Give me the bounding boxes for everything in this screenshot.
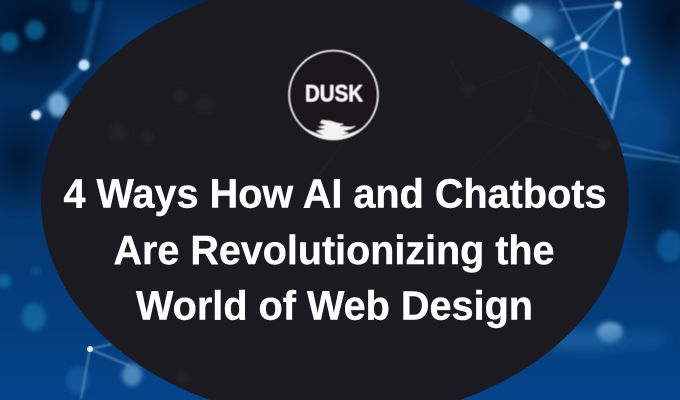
title [64, 170, 606, 328]
logo brush stroke [303, 120, 364, 139]
logo ring [289, 50, 378, 140]
background: network nodes lower left [0, 267, 142, 399]
logo: DUSK circle badge [289, 50, 378, 140]
title line 2: Are Revolutionizing the [114, 227, 554, 273]
title line 3: World of Web Design [136, 282, 533, 328]
logo wordmark: DUSK [305, 80, 363, 108]
title line 1: 4 Ways How AI and Chatbots [64, 170, 606, 216]
background: glow lower right [545, 230, 680, 350]
background: network nodes top left [0, 0, 100, 120]
background: network nodes top right [502, 0, 680, 162]
